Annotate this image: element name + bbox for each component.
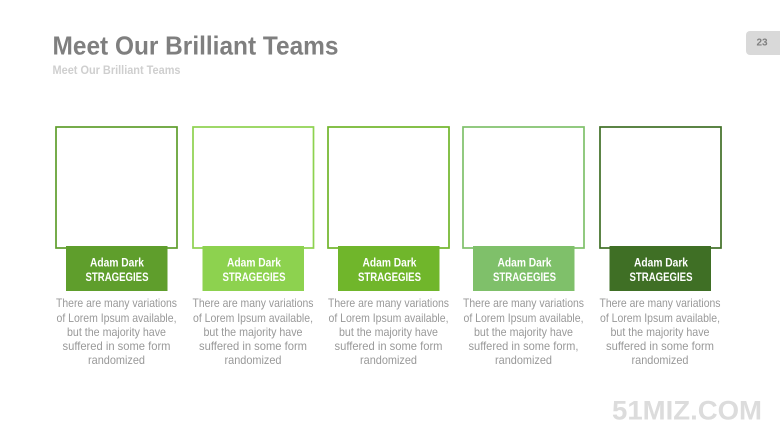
description 3: of Lorem Ipsum available, [328, 311, 448, 325]
description 3: There are many variations [328, 296, 449, 310]
name label 4 [473, 246, 574, 291]
description 3: randomized [360, 353, 417, 367]
title: Meet Our Brilliant Teams [52, 30, 338, 60]
description 1: randomized [88, 353, 145, 367]
photo frame 2 [193, 127, 314, 248]
watermark: 51MIZ.COM [612, 396, 762, 426]
page number tab: 23 [756, 38, 768, 48]
name label 5: STRAGEGIES [630, 270, 692, 284]
description 5: but the majority have [610, 325, 710, 339]
description 4: There are many variations [463, 296, 584, 310]
description 5 [600, 296, 720, 367]
name label 2 [202, 246, 304, 291]
name label 4: STRAGEGIES [493, 270, 556, 284]
description 4: of Lorem Ipsum available, [464, 311, 584, 325]
subtitle: Meet Our Brilliant Teams [52, 63, 181, 77]
description 4: suffered in some form, [468, 339, 578, 353]
name label 3 [338, 246, 440, 291]
description 4: but the majority have [474, 325, 573, 339]
panel: team member 1 [56, 127, 177, 367]
description 5: randomized [632, 353, 688, 367]
description 1: suffered in some form [62, 339, 171, 353]
description 5: suffered in some form [606, 339, 714, 353]
description 5: There are many variations [600, 296, 720, 310]
name label 5 [610, 246, 711, 291]
description 2: of Lorem Ipsum available, [193, 311, 313, 325]
panel: team member 3 [328, 127, 449, 367]
name label 2: STRAGEGIES [222, 270, 286, 284]
description 2 [192, 296, 314, 367]
page number tab [746, 31, 780, 55]
description 2: but the majority have [204, 325, 303, 339]
description 1: There are many variations [56, 296, 177, 310]
description 1 [56, 296, 177, 367]
description 3: suffered in some form [334, 339, 443, 353]
name label 2: Adam Dark [227, 256, 281, 270]
panel: team member 5 [600, 127, 721, 367]
name label 4: Adam Dark [498, 256, 552, 270]
description 2: suffered in some form [199, 339, 307, 353]
name label 1: Adam Dark [90, 256, 144, 270]
photo frame 1 [56, 127, 177, 248]
description 1: of Lorem Ipsum available, [56, 311, 176, 325]
photo frame 3 [328, 127, 449, 248]
name label 1: STRAGEGIES [86, 270, 148, 284]
description 2: randomized [224, 353, 282, 367]
description 3 [328, 296, 449, 367]
description 1: but the majority have [67, 325, 166, 339]
name label 5: Adam Dark [634, 256, 688, 270]
photo frame 5 [600, 127, 721, 248]
description 4: randomized [495, 353, 552, 367]
name label 3: STRAGEGIES [358, 270, 421, 284]
description 5: of Lorem Ipsum available, [600, 311, 720, 325]
description 4 [463, 296, 584, 367]
description 3: but the majority have [339, 325, 438, 339]
panel: team member 2 [192, 127, 314, 367]
name label 3: Adam Dark [362, 256, 417, 270]
panel: team member 4 [463, 127, 584, 367]
name label 1 [66, 246, 168, 291]
photo frame 4 [463, 127, 584, 248]
description 2: There are many variations [192, 296, 314, 310]
